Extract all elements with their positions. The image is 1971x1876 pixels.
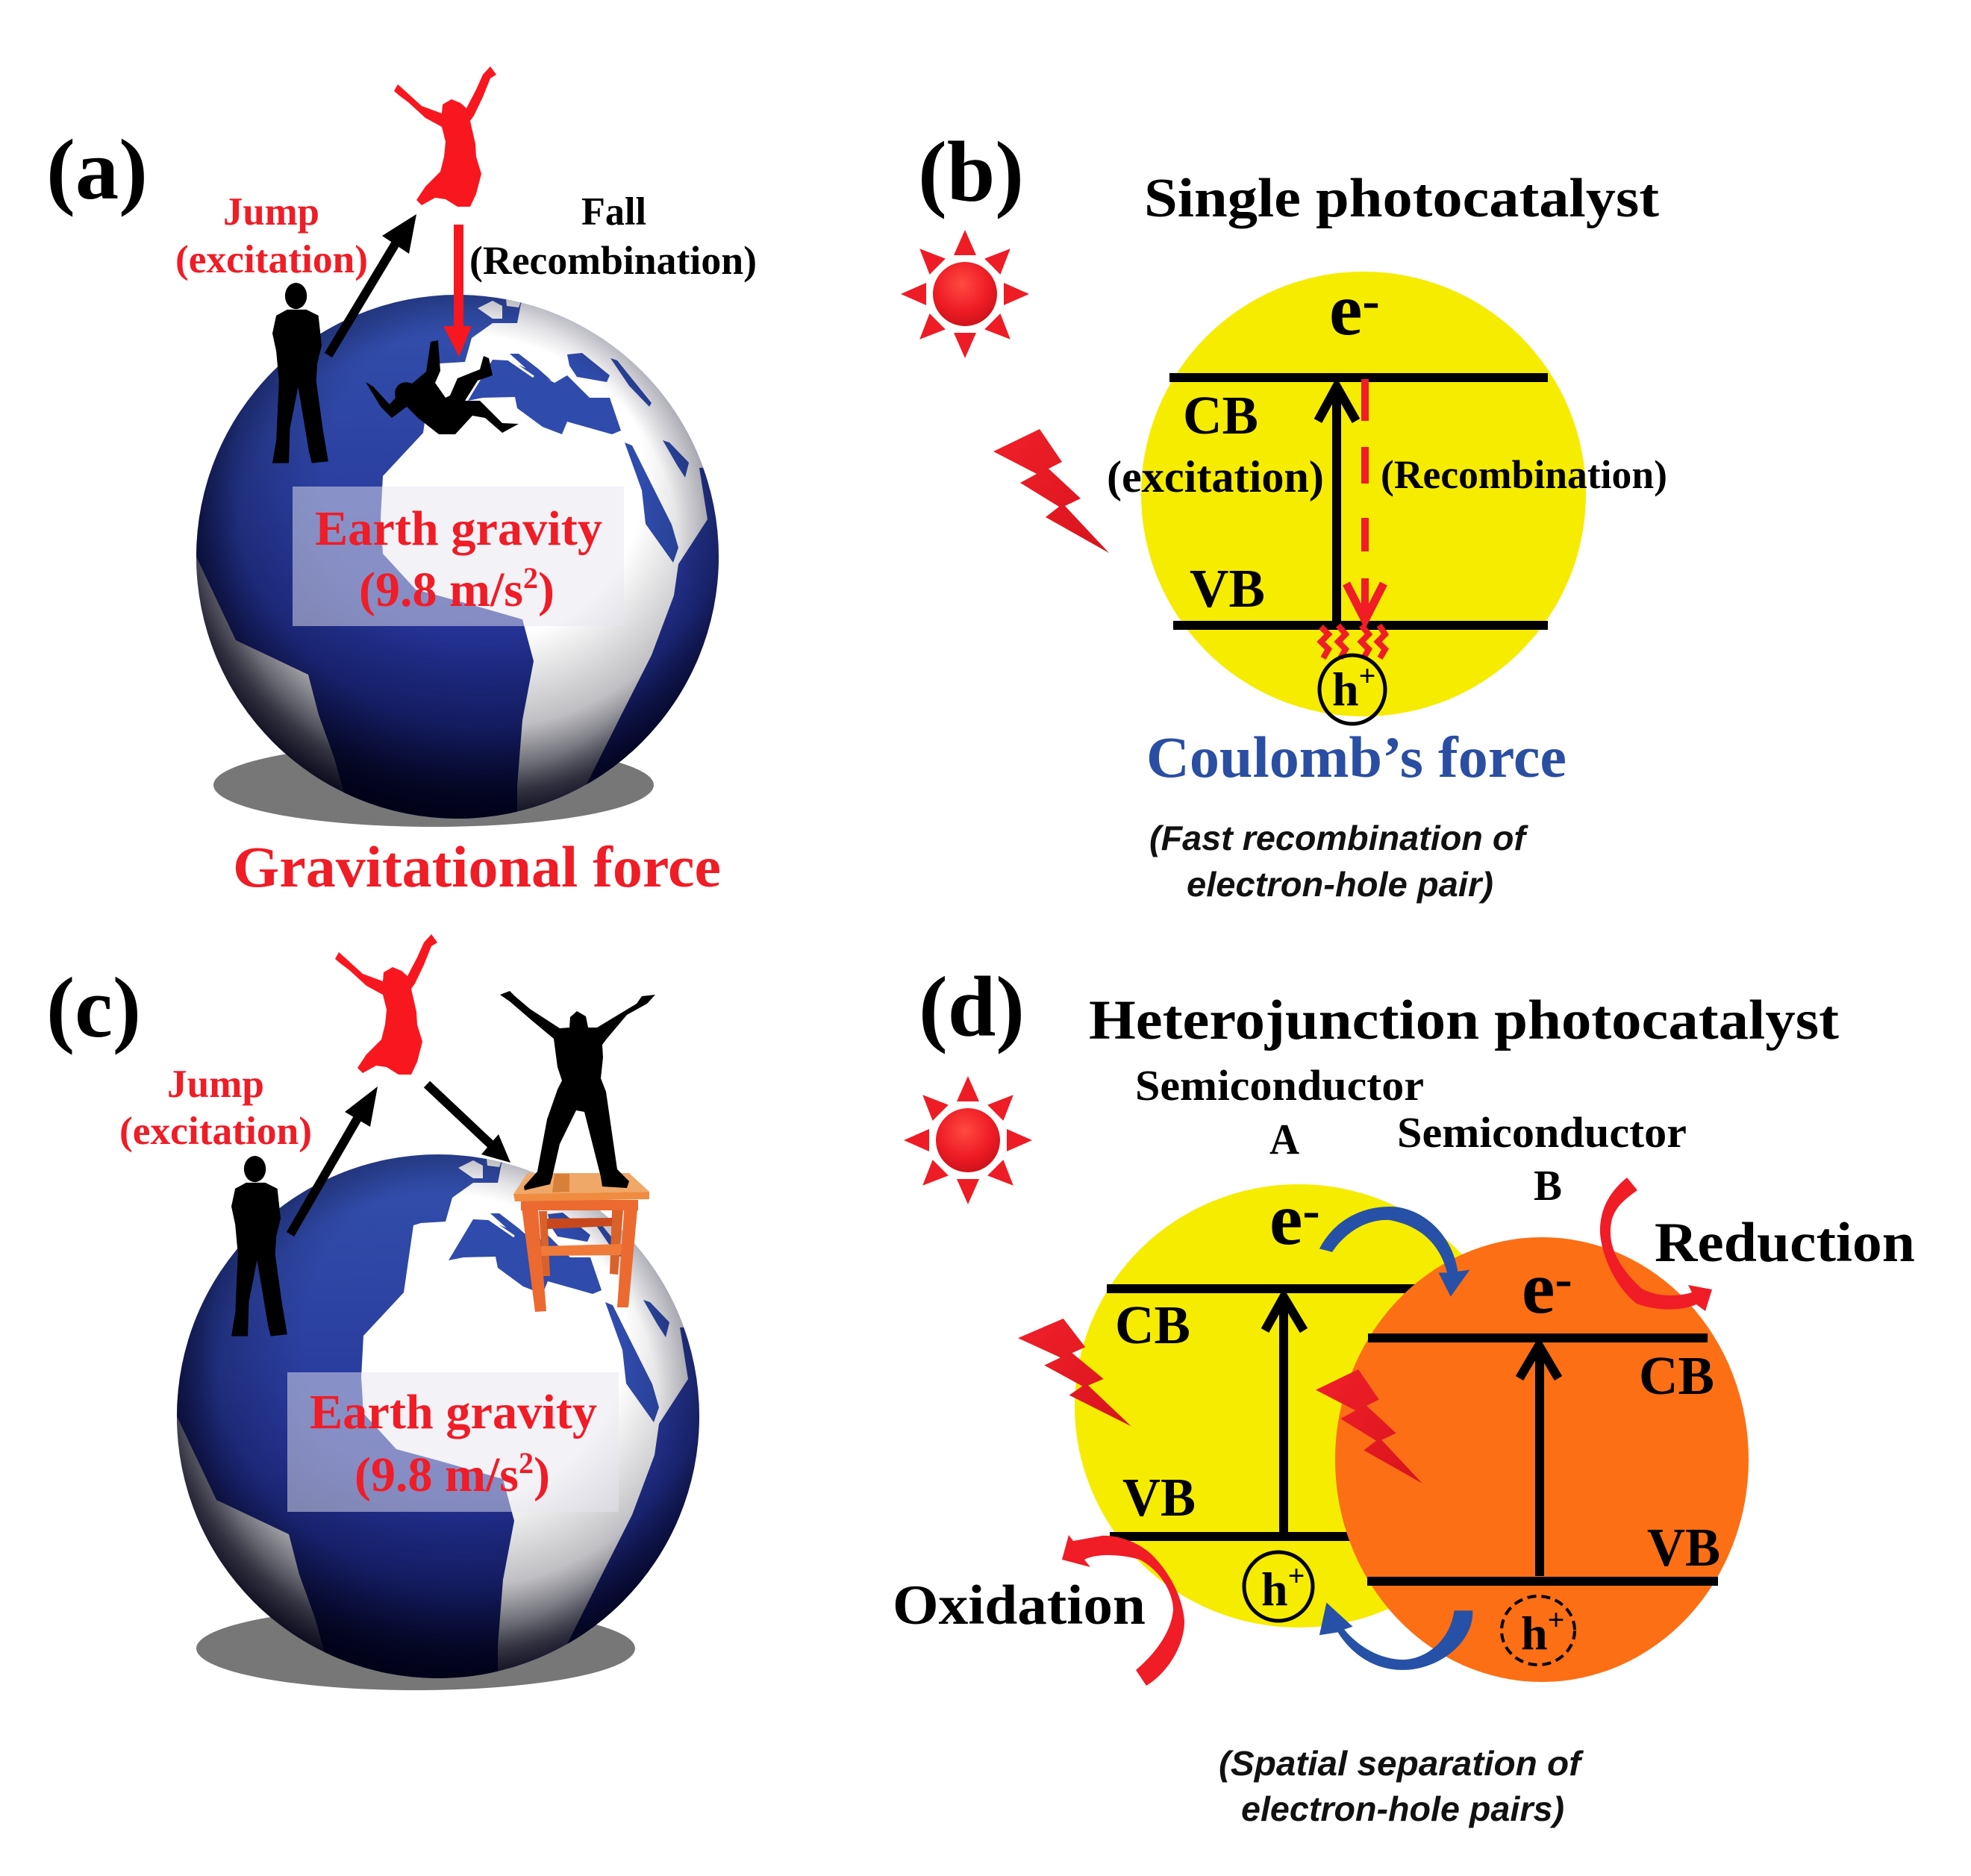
arrow: to stool [427, 1084, 510, 1163]
conduction band line [1169, 373, 1548, 382]
note: (Fast recombination of [1149, 819, 1529, 857]
arrow: fall [443, 225, 472, 357]
reduction label: Reduction [1655, 1212, 1915, 1274]
earth gravity box: (9.8 m/s [359, 563, 523, 617]
hole B dashed [1502, 1596, 1575, 1665]
VB label: VB [1190, 558, 1265, 619]
panel b: single photocatalyst [901, 125, 1667, 904]
arrow: excitation [1318, 387, 1356, 622]
semiconductor A label [1135, 1061, 1424, 1163]
oxidation label: Oxidation [893, 1575, 1146, 1636]
semiconductor B label: B [1534, 1161, 1562, 1210]
semiconductor B label [1397, 1108, 1687, 1210]
earth gravity box: 2 [523, 561, 538, 595]
earth gravity box: 2 [519, 1446, 534, 1480]
electrons: e [1269, 1178, 1302, 1260]
shadow under globe [213, 743, 654, 827]
note [1219, 1744, 1584, 1828]
gravitational force caption: Gravitational force [233, 834, 721, 899]
electrons: e [1522, 1246, 1555, 1329]
earth gravity box [293, 487, 624, 626]
band labels [1115, 1295, 1720, 1578]
arrow: recombination dashed [1346, 379, 1384, 620]
label (c): (c) [46, 960, 141, 1055]
victorious figure on stool [500, 991, 655, 1190]
panel c: stable excited state analogy [46, 934, 811, 1693]
CB label: CB [1183, 385, 1258, 445]
band labels: CB [1639, 1345, 1714, 1406]
band labels: VB [1122, 1467, 1196, 1528]
band lines B [1367, 1333, 1718, 1586]
note: electron-hole pair) [1187, 865, 1493, 904]
hole B dashed: + [1548, 1603, 1564, 1636]
Coulomb's force caption: Coulomb’s force [1146, 725, 1567, 790]
arrow: jump [328, 214, 416, 355]
band labels: VB [1647, 1517, 1720, 1578]
earth gravity box: (9.8 m/s [354, 1448, 519, 1502]
jumping figure [335, 934, 437, 1075]
excitation label: (excitation) [1107, 452, 1324, 501]
band labels: CB [1115, 1295, 1190, 1355]
icon: lightning on B [1316, 1369, 1422, 1483]
jump label [119, 1063, 312, 1153]
icon: lightning [993, 429, 1109, 553]
Coulomb attraction squiggles [1321, 625, 1385, 658]
fall label [469, 190, 757, 283]
jump label: (excitation) [175, 238, 368, 281]
orange semiconductor B [1335, 1237, 1749, 1682]
jump label: Jump [167, 1063, 264, 1106]
shadow under globe [196, 1607, 635, 1690]
electrons [1269, 1178, 1572, 1329]
valence band line [1173, 621, 1548, 630]
fall label: Fall [581, 190, 646, 234]
hole B dashed: h [1521, 1607, 1548, 1660]
curved arrow: reduction [1600, 1178, 1712, 1311]
hole: + [1359, 659, 1375, 692]
recombination label: (Recombination) [1381, 452, 1667, 497]
earth gravity box: ) [534, 1448, 550, 1502]
title: Heterojunction photocatalyst [1089, 989, 1839, 1051]
hole A: h [1261, 1563, 1288, 1616]
hole [1319, 655, 1385, 724]
semiconductor A label: A [1269, 1115, 1299, 1163]
label (a): (a) [46, 122, 148, 217]
jump label [175, 190, 368, 281]
panel d: heterojunction photocatalyst [893, 960, 1915, 1828]
electron: e [1329, 268, 1362, 351]
curved arrow: hole transfer [1319, 1603, 1472, 1670]
earth gravity box: Earth gravity [315, 501, 602, 556]
hole A [1244, 1552, 1313, 1621]
arrow: jump [290, 1086, 378, 1234]
standing figure [272, 283, 328, 463]
note [1149, 819, 1529, 904]
panel a: gravitational analogy of recombination [46, 66, 831, 899]
falling figure [366, 340, 519, 434]
jump label: Jump [223, 190, 319, 234]
standing figure [231, 1156, 287, 1336]
band lines A [1107, 1284, 1419, 1541]
curved arrow: oxidation [1062, 1535, 1184, 1686]
label (d): (d) [919, 960, 1025, 1054]
hole A: + [1288, 1559, 1305, 1592]
label (b): (b) [918, 125, 1024, 219]
icon: sun [904, 1076, 1032, 1204]
icon: sun [901, 230, 1029, 358]
semiconductor A label: Semiconductor [1135, 1061, 1424, 1110]
curved arrow: electron transfer [1319, 1207, 1469, 1297]
electrons: - [1302, 1182, 1320, 1239]
jumping figure [394, 66, 496, 207]
earth gravity box [287, 1372, 619, 1512]
earth gravity box: Earth gravity [310, 1385, 597, 1439]
stool [513, 1173, 649, 1312]
jump label: (excitation) [119, 1110, 312, 1153]
electrons: - [1555, 1251, 1572, 1308]
hole: h [1332, 663, 1359, 716]
earth gravity box: ) [538, 563, 555, 617]
arrow: excitation B [1519, 1345, 1558, 1576]
semiconductor B label: Semiconductor [1397, 1108, 1687, 1157]
note: (Spatial separation of [1219, 1744, 1584, 1783]
fall label: (Recombination) [469, 238, 757, 283]
globe [65, 1118, 811, 1693]
globe [84, 258, 831, 834]
yellow semiconductor A [1075, 1184, 1522, 1628]
yellow photocatalyst particle [1141, 272, 1586, 716]
title: Single photocatalyst [1144, 168, 1659, 229]
note: electron-hole pairs) [1241, 1789, 1564, 1828]
icon: lightning on A [1018, 1319, 1131, 1426]
arrow: excitation A [1265, 1297, 1304, 1533]
electron: - [1362, 272, 1380, 330]
